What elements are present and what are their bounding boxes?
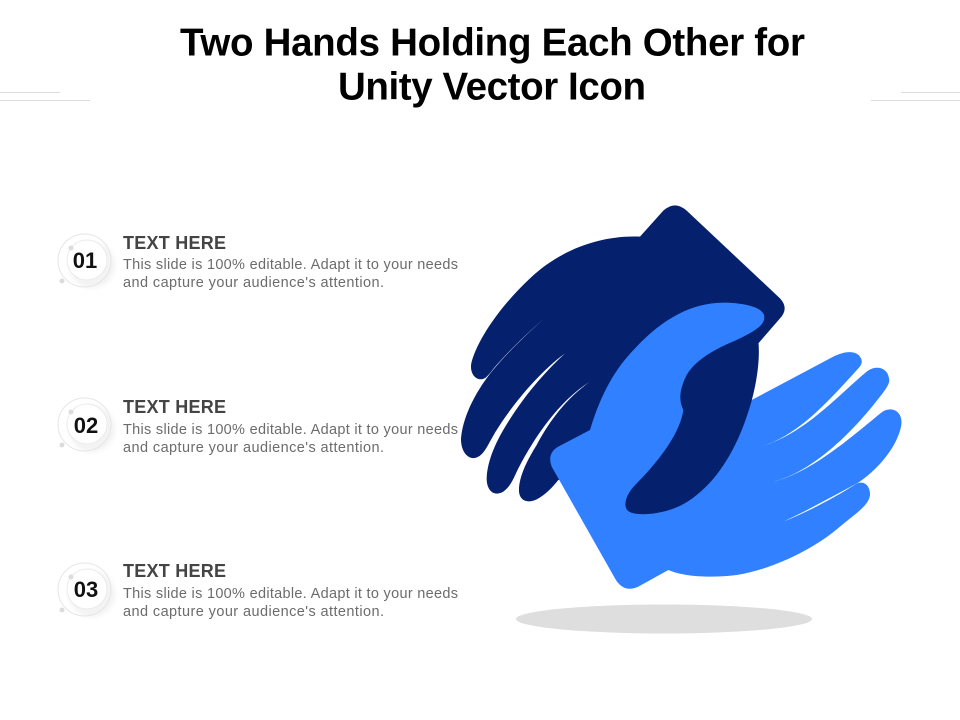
dark blue thumb [625,337,759,514]
badge 03 [58,563,119,621]
item 03 [58,561,458,621]
item 02 [58,397,458,456]
text block 03: TEXT HERE [123,561,226,581]
badge 03: 03 [74,577,98,602]
text block 01: and capture your audience's attention. [123,275,384,291]
text block 03: and capture your audience's attention. [123,604,384,620]
badge 01 [58,234,119,292]
title: Two Hands Holding Each Other for [180,22,805,64]
text block 03 [123,561,458,620]
text block 01: This slide is 100% editable. Adapt it to your needs [123,257,458,273]
text block 02: and capture your audience's attention. [123,440,384,456]
ground shadow [516,604,812,634]
text block 02: This slide is 100% editable. Adapt it to your needs [123,422,458,438]
text block 01: TEXT HERE [123,233,226,253]
text block 02 [123,397,458,456]
badge 01: 01 [73,248,97,273]
title [180,22,805,108]
icon: two hands holding [461,205,902,589]
dark blue hand [461,205,785,501]
badge 02 [58,398,119,456]
light blue thumb [590,303,764,507]
text block 01 [123,233,458,291]
light blue hand [550,352,902,589]
title: Unity Vector Icon [338,66,646,108]
badge 02: 02 [74,413,98,438]
text block 03: This slide is 100% editable. Adapt it to your needs [123,586,458,602]
text block 02: TEXT HERE [123,397,226,417]
item 01 [58,233,458,292]
